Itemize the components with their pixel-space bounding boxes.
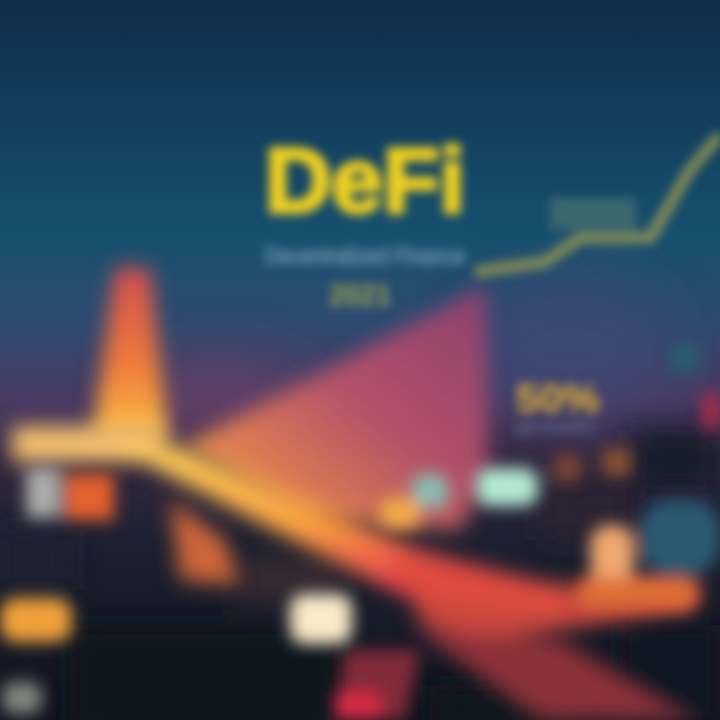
bokeh lights	[0, 344, 720, 714]
bridge deck glow	[12, 426, 700, 720]
subtitle: Decentralized Finance	[265, 243, 465, 270]
bridge lights	[26, 468, 420, 720]
small heading label: 2021	[329, 279, 391, 312]
bridge tower	[92, 268, 168, 440]
stat caption: growth	[515, 419, 595, 436]
background glow: purple haze	[130, 280, 670, 440]
triangular light fan	[185, 285, 488, 530]
stat value: 50%	[516, 377, 600, 421]
line chart: rising trend	[475, 135, 720, 272]
dark city silhouette	[0, 430, 720, 720]
title: DeFi	[265, 130, 465, 232]
